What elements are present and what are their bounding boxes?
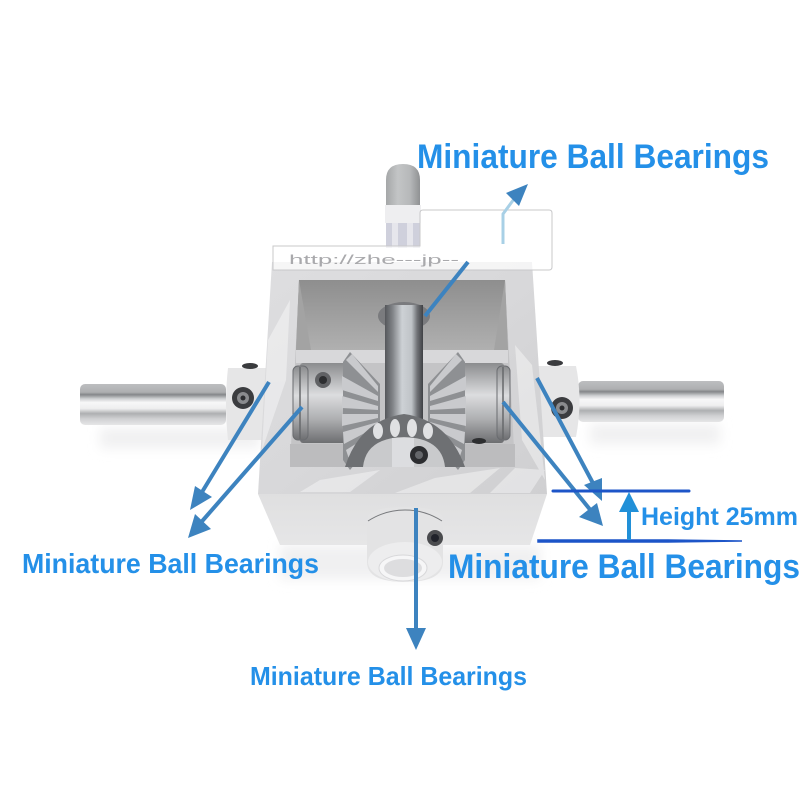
left bevel gear	[342, 352, 380, 470]
arrow: left inner	[188, 407, 302, 538]
soft shadows	[100, 424, 720, 579]
left bearing and hub	[293, 363, 346, 443]
cavity	[290, 280, 515, 467]
right bearing and hub	[462, 363, 510, 444]
label: top bearing: Miniature Ball Bearings	[417, 138, 769, 176]
shaft: left	[80, 363, 272, 440]
height dimension	[538, 491, 742, 542]
aluminium scratches	[262, 300, 545, 493]
shaft: right	[530, 360, 724, 437]
arrow: bottom collar	[406, 508, 426, 650]
gearbox housing	[258, 262, 547, 545]
overlay: translucent watermark box	[273, 210, 552, 270]
arrow: top bearing	[425, 184, 528, 316]
right bevel gear	[428, 352, 466, 470]
bottom bevel gear	[345, 414, 465, 467]
label: left bearing: Miniature Ball Bearings	[22, 548, 319, 579]
watermark text: http://zhe---jp--	[289, 252, 459, 267]
label: bottom bearing: Miniature Ball Bearings	[250, 661, 527, 691]
arrow: left outer	[190, 382, 269, 510]
shaft: top	[385, 164, 421, 248]
arrow: right inner	[503, 402, 603, 526]
label: height 25mm: Height 25mm	[641, 503, 798, 531]
output collar: front	[367, 507, 443, 582]
arrow: right outer	[537, 378, 602, 501]
input shaft: vertical	[378, 302, 430, 430]
